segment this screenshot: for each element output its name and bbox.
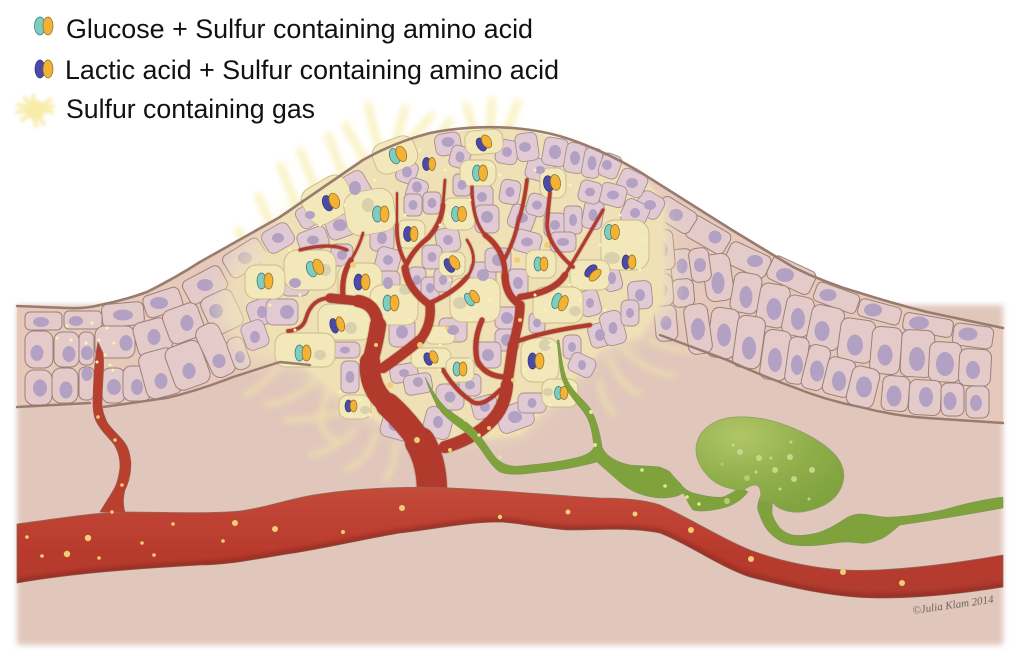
signature: ©Julia Klam 2014 [912,594,995,617]
legend label: glucose: Glucose + Sulfur containing amino acid [66,14,533,44]
green lymph duct [425,340,1003,546]
pale dots in green sac and duct [448,376,815,506]
legend label: lactic acid: Lactic acid + Sulfur containing amino acid [65,55,559,85]
tumor: extra lilac cells at the fringes [239,156,667,352]
tumor: lilac cells [266,131,652,443]
tumor region: cream base [245,128,665,445]
sulfur gas cloud below the dome [200,205,705,480]
epithelial cells: right side [648,194,994,418]
panel: epithelium band [17,128,1003,445]
molecules: glucose (teal+orange) and lactic acid (indigo+orange) [257,133,636,412]
cell nuclei: left and right epithelium [30,209,982,411]
main artery [17,487,1003,598]
dots in main artery and vessels [25,242,905,586]
tumor region: soft yellow glow over neighbouring cells [215,133,675,448]
legend icon: lactic acid molecule [35,60,53,78]
sulfur gas cloud above the dome [238,100,518,255]
tumor: cream cells holding the molecules [245,128,649,419]
small vessel on the left [93,342,131,512]
epithelial cells: left side [25,236,270,405]
legend icon: glucose molecule [34,17,53,35]
capillary tumor vessel tree [288,180,603,492]
green kidney-shaped sac [696,417,844,512]
gray nuclei: cream cells [314,198,620,414]
epithelium boundary lines [17,127,1003,423]
legend icon: sulfur gas [17,96,53,126]
legend [17,14,559,126]
panel: connective tissue background [17,305,1003,645]
yellow sulfur dots in tissue [56,144,646,416]
nuclei: tumor cells [250,137,656,431]
legend label: gas: Sulfur containing gas [66,94,315,124]
